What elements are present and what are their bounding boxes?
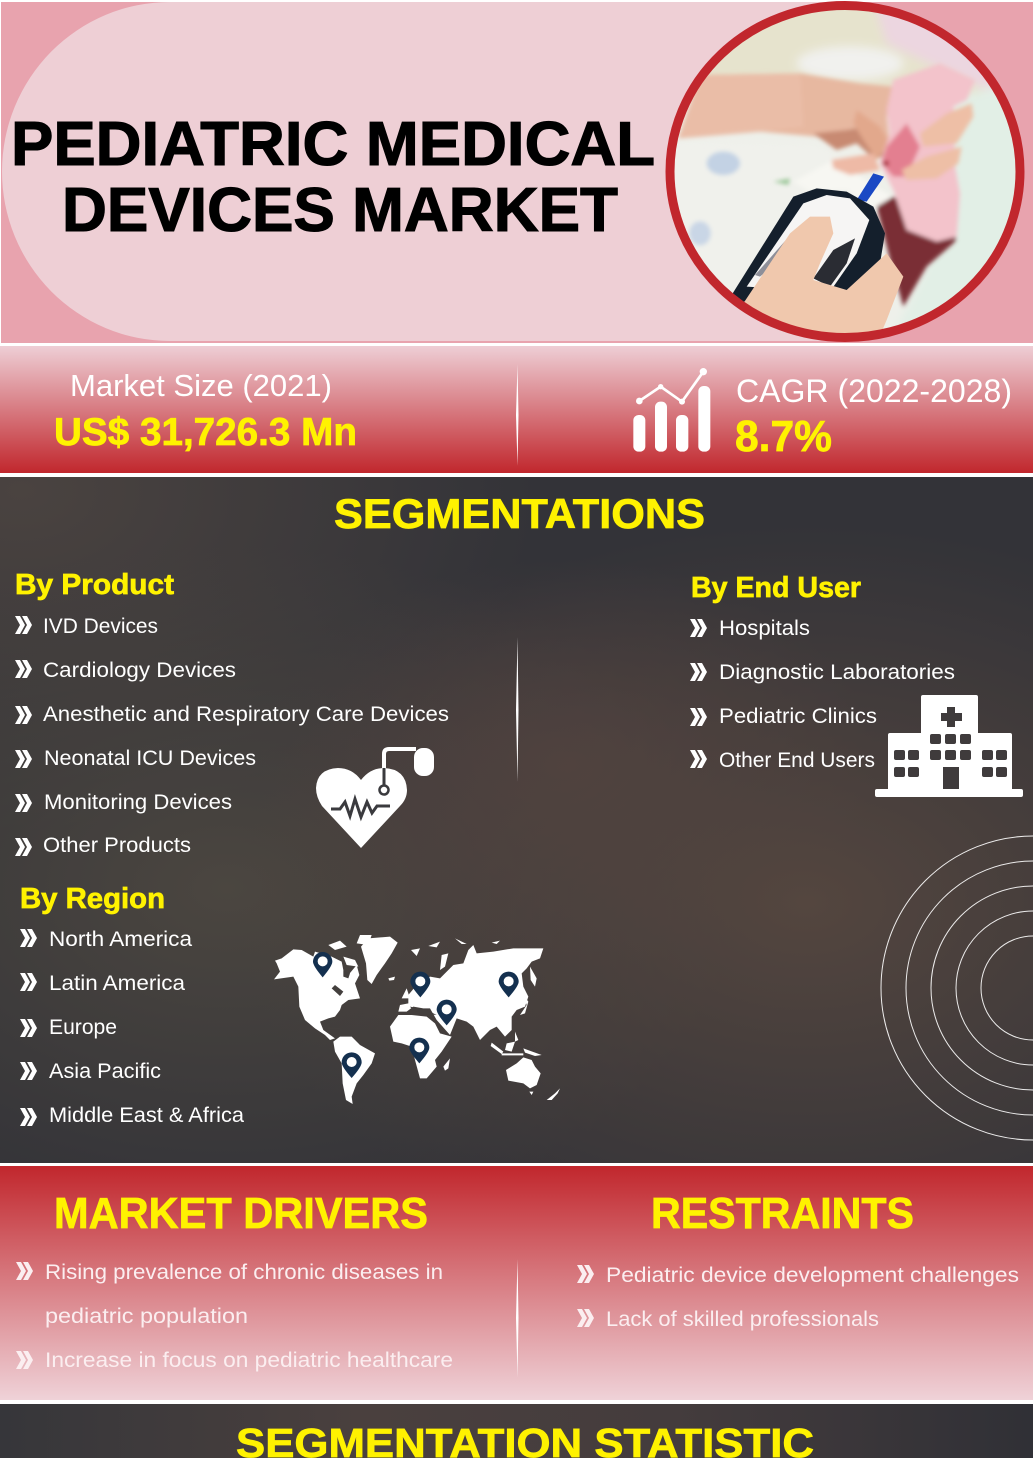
title: PEDIATRIC MEDICAL	[11, 110, 655, 179]
panel: drivers and restraints	[0, 1163, 1033, 1404]
list: by product: Neonatal ICU Devices	[44, 747, 256, 770]
list: drivers: pediatric population	[45, 1305, 248, 1328]
title	[11, 110, 655, 245]
list: by end user: Hospitals	[719, 617, 810, 640]
icon: growth bar chart	[633, 368, 710, 452]
list: drivers: Rising prevalence of chronic diseases in	[45, 1261, 443, 1284]
list: by product: Anesthetic and Respiratory Care Devices	[43, 703, 449, 726]
list: by end user: Other End Users	[719, 749, 875, 772]
icon: heart with pacemaker	[316, 748, 434, 848]
divider	[516, 1259, 518, 1378]
list: by product: Other Products	[43, 834, 191, 857]
list: drivers: Increase in focus on pediatric healthcare	[45, 1349, 453, 1372]
list: by product: Monitoring Devices	[44, 791, 232, 814]
list: by region: By Region	[20, 883, 165, 915]
divider	[516, 364, 518, 466]
list: by region: Latin America	[49, 972, 185, 995]
list: by product: Cardiology Devices	[43, 659, 236, 682]
list: by end user: By End User	[691, 572, 861, 604]
decoration: concentric rings	[881, 836, 1033, 1140]
icon: hospital building	[875, 695, 1023, 797]
list: by region: Middle East & Africa	[49, 1104, 244, 1127]
list: by end user: Diagnostic Laboratories	[719, 661, 955, 684]
list: by region	[20, 883, 244, 1127]
list: by end user	[690, 572, 955, 772]
metric: CAGR: CAGR (2022-2028)	[736, 373, 1012, 409]
list: by region: North America	[49, 928, 192, 951]
world map with location pins	[274, 935, 560, 1104]
list: drivers	[16, 1261, 453, 1372]
metric: market size: US$ 31,726.3 Mn	[54, 411, 357, 454]
list: by region: Asia Pacific	[49, 1060, 161, 1083]
list: by region: Europe	[49, 1016, 117, 1039]
divider	[516, 637, 518, 782]
photo: newborn heel blood glucose test	[660, 0, 1033, 345]
list: by end user: Pediatric Clinics	[719, 705, 877, 728]
list: by product: By Product	[15, 569, 174, 601]
list: restraints: Pediatric device development challenges	[606, 1264, 1019, 1287]
panel: segmentation statistic	[0, 1404, 1033, 1458]
list: restraints	[577, 1264, 1019, 1331]
metric: market size	[54, 368, 357, 454]
metric: CAGR	[735, 373, 1012, 461]
metric: CAGR: 8.7%	[735, 412, 832, 461]
white separator and metrics band	[0, 343, 1033, 476]
heading: restraints: RESTRAINTS	[651, 1189, 914, 1238]
heading: SEGMENTATIONS	[334, 490, 705, 537]
list: by product: IVD Devices	[43, 615, 158, 638]
panel: segmentations	[0, 477, 1033, 1163]
panel: header	[1, 0, 1033, 345]
heading: market drivers: MARKET DRIVERS	[54, 1189, 428, 1238]
title: DEVICES MARKET	[62, 176, 618, 245]
list: by product	[15, 569, 449, 857]
list: restraints: Lack of skilled professionals	[606, 1308, 879, 1331]
metric: market size: Market Size (2021)	[70, 368, 332, 403]
